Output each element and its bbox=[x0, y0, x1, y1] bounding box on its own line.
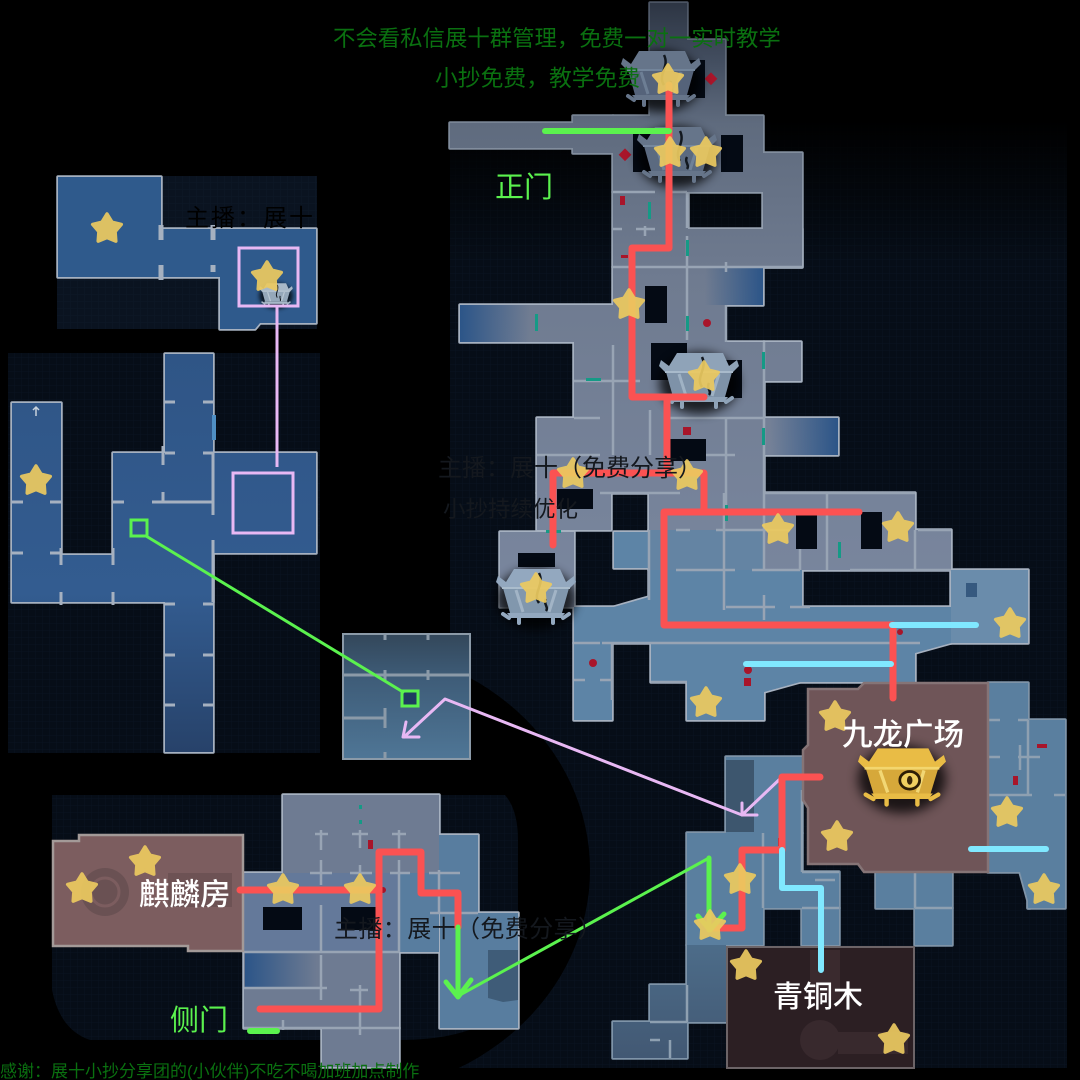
heading: top notice line 2: 小抄免费，教学免费 bbox=[435, 65, 640, 91]
panel: middle-left floor rooms bbox=[12, 354, 316, 752]
panel: bottom-left floor rooms bbox=[244, 795, 518, 1067]
watermark text: centre line 1: 主播：展十（免费分享） bbox=[438, 455, 702, 482]
icon: golden chest bbox=[858, 745, 946, 813]
holes bbox=[263, 907, 376, 930]
red route: main entrance to plaza bbox=[553, 85, 893, 698]
green route: main gate bbox=[545, 128, 669, 134]
red route: bottom-left floor bbox=[240, 852, 458, 1009]
panel: main upper map rooms bbox=[450, 3, 1028, 720]
icon: small chest in top-left floor bbox=[259, 283, 293, 309]
red markers bbox=[589, 72, 903, 686]
green connector: main route to hidden room bbox=[131, 520, 709, 996]
panel: small connecting room bbox=[343, 634, 470, 759]
panel: bronze wood room bbox=[727, 947, 914, 1068]
icon: chest 4 bbox=[496, 568, 576, 630]
panel: jiulong plaza room bbox=[803, 683, 988, 872]
label: main gate: 正门 bbox=[495, 171, 553, 204]
panel: bottom-left floor backdrop bbox=[52, 795, 518, 1040]
interior walls bbox=[537, 192, 951, 700]
pink arrows: hidden passage bbox=[403, 699, 782, 815]
interior walls bbox=[244, 830, 478, 1035]
red markers bbox=[778, 744, 1047, 846]
label: bronze wood: 青铜木 bbox=[773, 981, 863, 1014]
watermark text: centre line 2: 小抄持续优化 bbox=[443, 497, 578, 522]
panel: middle-left floor backdrop bbox=[8, 353, 320, 753]
panel: top-left floor backdrop bbox=[57, 176, 317, 329]
icon: chest 3 bbox=[659, 352, 739, 414]
heading: top notice line 1: 不会看私信展十群管理，免费一对一实时教学 bbox=[333, 26, 781, 51]
green arrow: bottom-left bbox=[446, 927, 471, 997]
label: jiulong plaza: 九龙广场 bbox=[842, 718, 964, 752]
cyan routes bbox=[746, 625, 1046, 970]
teal doors bbox=[535, 202, 841, 558]
watermark text: top-left floor: 主播：展十 bbox=[185, 205, 315, 232]
label: side gate: 侧门 bbox=[170, 1004, 228, 1037]
panel: lower-right rooms bbox=[613, 683, 1065, 1058]
green arrow: lower-right bbox=[698, 858, 724, 930]
holes in main map bbox=[518, 60, 882, 567]
teal and red markers bbox=[260, 805, 386, 893]
watermark text: bottom-left floor: 主播：展十（免费分享） bbox=[334, 916, 602, 943]
green route: side gate bbox=[250, 1028, 277, 1034]
blue end rooms bbox=[460, 268, 977, 597]
panel: qilin room bbox=[53, 835, 243, 951]
interior walls bbox=[650, 720, 1065, 1058]
icon: chest 1 bbox=[621, 50, 701, 112]
panel: top-left floor rooms bbox=[58, 177, 316, 329]
icon: chest 2 bbox=[637, 126, 717, 188]
blue flooded rooms bbox=[574, 530, 1028, 720]
pink connector: upper boxes bbox=[233, 248, 298, 533]
red route: plaza to side room bbox=[713, 777, 820, 928]
label: qilin room: 麒麟房 bbox=[139, 878, 230, 912]
